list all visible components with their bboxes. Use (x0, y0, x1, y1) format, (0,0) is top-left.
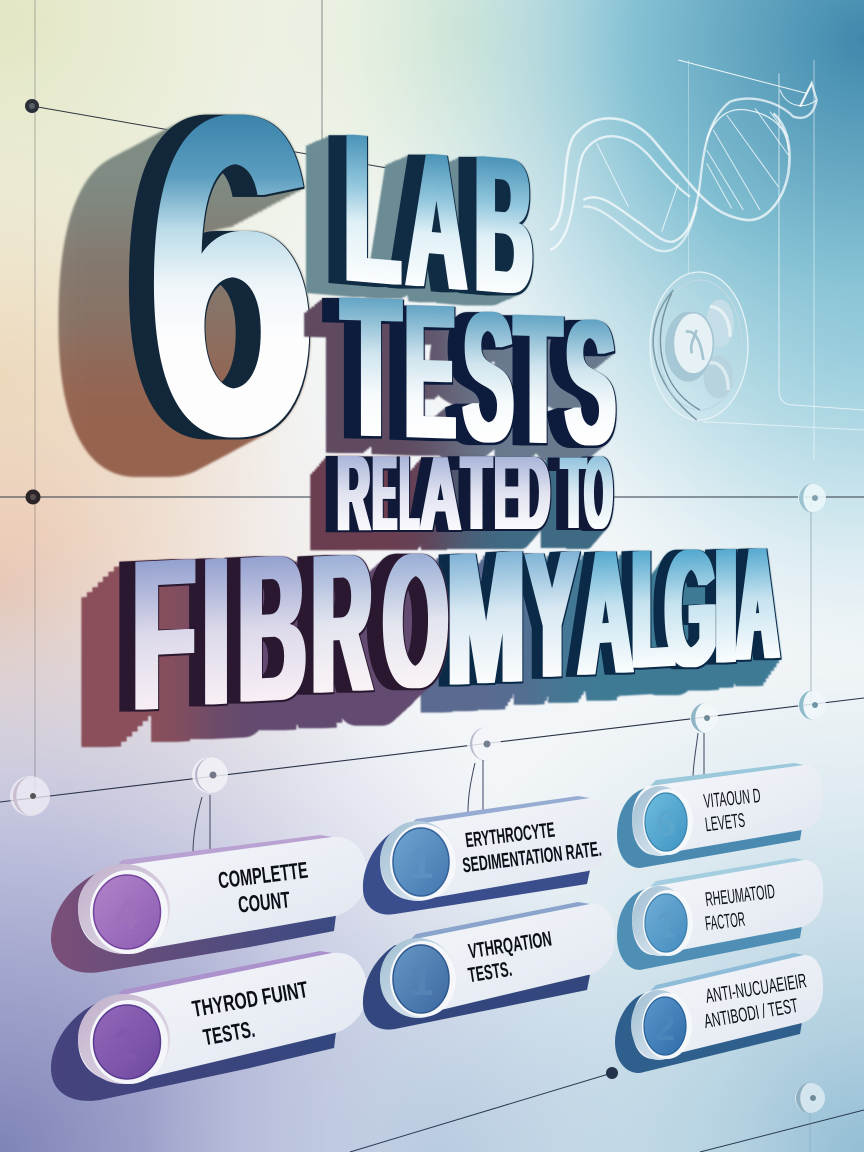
text: vitamin D levels (703, 785, 762, 836)
title word: TESTS: S (463, 273, 514, 481)
icon: purple number disc: 2 (114, 1020, 138, 1069)
title words: RELATED TO: L (400, 433, 418, 553)
text: anti-nuclear antibody test (702, 970, 808, 1033)
panel: test anti-nuclear antibody (615, 953, 823, 1073)
title word: FIBROMYALGIA (right part): L (632, 514, 674, 705)
title words: RELATED TO: T (562, 437, 585, 550)
panel: test 4 complete count (51, 835, 367, 973)
icon: purple number disc: 4 (114, 890, 139, 939)
icon: blue number disc: 1 (656, 904, 676, 945)
title word: TESTS: E (404, 264, 456, 481)
title (132, 20, 778, 756)
title word: FIBROMYALGIA (left part): F (132, 512, 195, 756)
text: anti-nuclear antibody test: ANTIBODI / TEST (702, 995, 800, 1033)
title word: LAB: A (406, 111, 466, 332)
text: complete count (217, 857, 309, 918)
DNA helix line art (550, 60, 864, 460)
text: complete count: COMPLETTE (217, 857, 309, 893)
title word: FIBROMYALGIA (left part): I (203, 513, 229, 750)
title word: LAB (344, 89, 533, 337)
panel: test rheumatoid factor (617, 858, 823, 970)
title words: RELATED TO: E (495, 434, 520, 552)
text: erythrocyte sedimentation rate (461, 819, 603, 877)
title words: RELATED TO: R (337, 432, 370, 553)
title words: RELATED TO: O (585, 437, 612, 551)
panel: test 1 erythrocyte sedimentation rate (363, 796, 615, 915)
icon: teal number disc: 6 (656, 803, 676, 844)
big number 6: 6 (146, 20, 317, 530)
text: thyroid function tests: THYROD FUINT (190, 976, 310, 1022)
icon: blue number disc: 1 (409, 839, 433, 888)
icon: dark blue number disc: 2 (655, 1007, 675, 1048)
icon: blue number disc (380, 821, 456, 901)
icon: purple number disc (78, 864, 170, 954)
text: erythrocyte sedimentation rate: ERYTHROCYTE (464, 819, 556, 852)
text: vitamin D levels: LEVETS (704, 810, 746, 836)
text: thyroid function tests (190, 976, 310, 1050)
panel: test 2 thyroid function tests (51, 951, 367, 1101)
icon: dark blue number disc (631, 990, 692, 1060)
icon: blue number disc (380, 938, 456, 1018)
title word: FIBROMYALGIA (right part): A (579, 511, 632, 713)
title word: TESTS: T (514, 276, 562, 484)
title words: RELATED TO: A (420, 433, 461, 553)
panel: test 1 vibration tests (363, 902, 615, 1030)
title words: RELATED TO: E (373, 433, 396, 553)
title word: FIBROMYALGIA (left part): B (238, 510, 306, 747)
text: vitamin D levels: VITAOUN D (703, 785, 762, 813)
text: rheumatoid factor: RHEUMATOID (704, 881, 776, 911)
icon: blue number disc (632, 886, 693, 956)
title words: RELATED TO: D (518, 435, 550, 552)
icon: petri dish with cells (650, 272, 748, 420)
title word: TESTS (341, 255, 616, 484)
text: vibration tests: VTHRQATION (467, 928, 553, 963)
text: vibration tests (467, 928, 553, 987)
title words: RELATED TO (337, 432, 612, 553)
title words: RELATED TO: T (462, 434, 491, 552)
title word: LAB: L (344, 89, 401, 330)
title word: FIBROMYALGIA (right part): Y (527, 514, 577, 717)
title word: FIBROMYALGIA (left part): R (312, 513, 372, 736)
title word: LAB: B (475, 114, 533, 337)
panel: test 6 vitamin D levels (617, 763, 823, 868)
title word: TESTS: S (565, 282, 616, 482)
title word: TESTS: T (341, 255, 401, 480)
title word: FIBROMYALGIA (left part) (132, 510, 448, 756)
title word: FIBROMYALGIA (right part) (448, 510, 778, 726)
icon: purple number disc (78, 994, 170, 1084)
text: thyroid function tests: TESTS. (201, 1016, 257, 1050)
text: complete count: COUNT (237, 886, 291, 918)
text: rheumatoid factor (704, 881, 776, 935)
hanging strings (193, 733, 704, 852)
title word: FIBROMYALGIA (right part): M (448, 510, 525, 726)
text: vibration tests: TESTS. (467, 958, 514, 987)
title word: FIBROMYALGIA (right part): G (666, 514, 716, 703)
title word: FIBROMYALGIA (left part): O (383, 514, 448, 729)
title word: FIBROMYALGIA (right part): A (737, 514, 778, 695)
text: erythrocyte sedimentation rate: SEDIMENTATION RATE. (461, 838, 603, 877)
title word: FIBROMYALGIA (right part): I (715, 514, 737, 698)
icon: blue number disc: 1 (409, 956, 433, 1005)
icon: teal number disc (632, 786, 693, 856)
text: rheumatoid factor: FACTOR (704, 909, 746, 935)
